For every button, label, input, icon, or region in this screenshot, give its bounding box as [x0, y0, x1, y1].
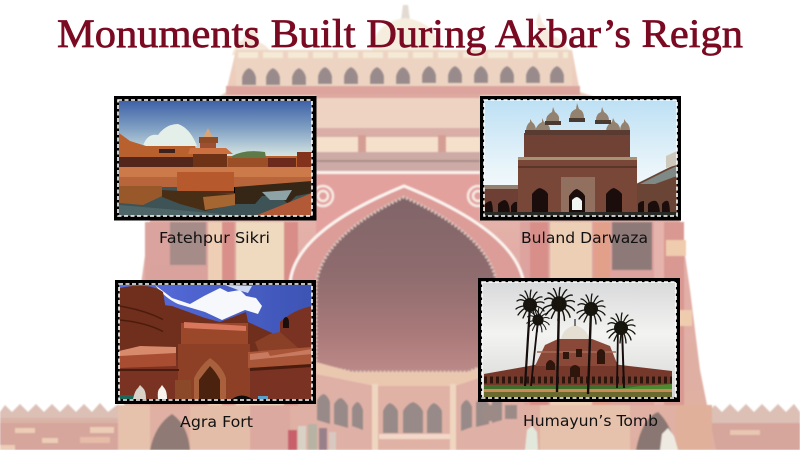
central arch outline [290, 186, 524, 400]
photo card: Agra Fort [115, 280, 316, 431]
label: Agra Fort [180, 413, 253, 431]
photo frame [478, 278, 680, 402]
domes on the roof [232, 5, 572, 55]
crowd at the bottom [288, 424, 678, 450]
label: Humayun’s Tomb [523, 412, 658, 430]
dashed inner border [119, 284, 312, 400]
photo card: Humayun's Tomb [478, 278, 680, 430]
lower side arches and pillars [118, 405, 712, 450]
dashed inner border [482, 282, 676, 398]
main tower body [118, 50, 716, 450]
label: Fatehpur Sikri [159, 229, 270, 247]
title: Monuments Built During Akbar’s Reign [57, 11, 743, 56]
lower octagonal band [298, 360, 524, 450]
side wall left [0, 403, 125, 450]
photo: Agra Fort walls [119, 285, 312, 400]
lower arcade windows [317, 394, 502, 433]
dark arch interior [316, 197, 497, 372]
photo card: Fatehpur Sikri [114, 96, 316, 247]
photo: Fatehpur Sikri palace and pool [119, 101, 312, 216]
medallions beside the arch [313, 186, 488, 206]
right side of the tower [520, 222, 692, 405]
top arcade band [226, 50, 580, 95]
photo frame [114, 96, 316, 220]
photo: Humayun's Tomb with palms [482, 282, 676, 397]
photo card: Buland Darwaza [480, 96, 681, 247]
dashed inner border [484, 100, 677, 216]
photo frame [115, 280, 316, 404]
side wall right [708, 404, 800, 450]
label: Buland Darwaza [521, 229, 648, 247]
left side of the tower [145, 222, 298, 405]
upper panels above the arch [316, 94, 480, 234]
photo: Buland Darwaza gate [484, 100, 677, 217]
photo frame [480, 96, 681, 220]
dashed inner border [118, 100, 312, 216]
